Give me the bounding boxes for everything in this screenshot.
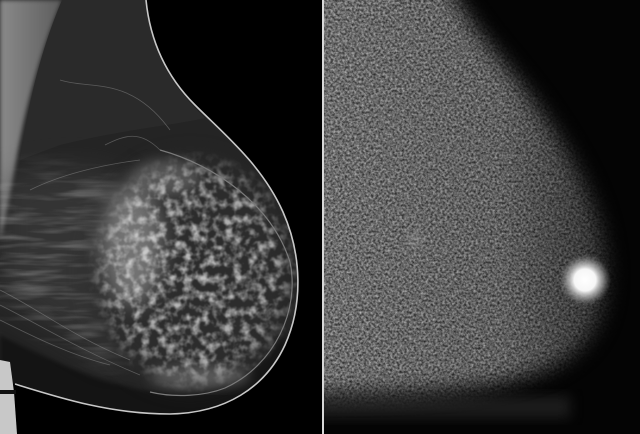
breast silhouette [0,0,297,414]
panel: nuclear scan [324,0,620,423]
breast uptake area [324,0,617,408]
hot spot lesion [559,254,611,306]
divider [322,0,324,434]
faint focal uptake [406,231,424,249]
chest marker [0,360,17,434]
fibrous strands [0,80,170,375]
upper breast fat [29,1,62,108]
pectoral muscle [0,0,62,240]
fibrous texture [0,161,118,365]
panel: mammogram [0,0,322,434]
left fibrous haze [0,170,114,348]
tissue texture [90,152,297,390]
dark fatty lower rim [0,336,286,413]
skin line [15,0,298,414]
bottom glow [300,396,570,418]
dense glandular base [82,192,154,351]
